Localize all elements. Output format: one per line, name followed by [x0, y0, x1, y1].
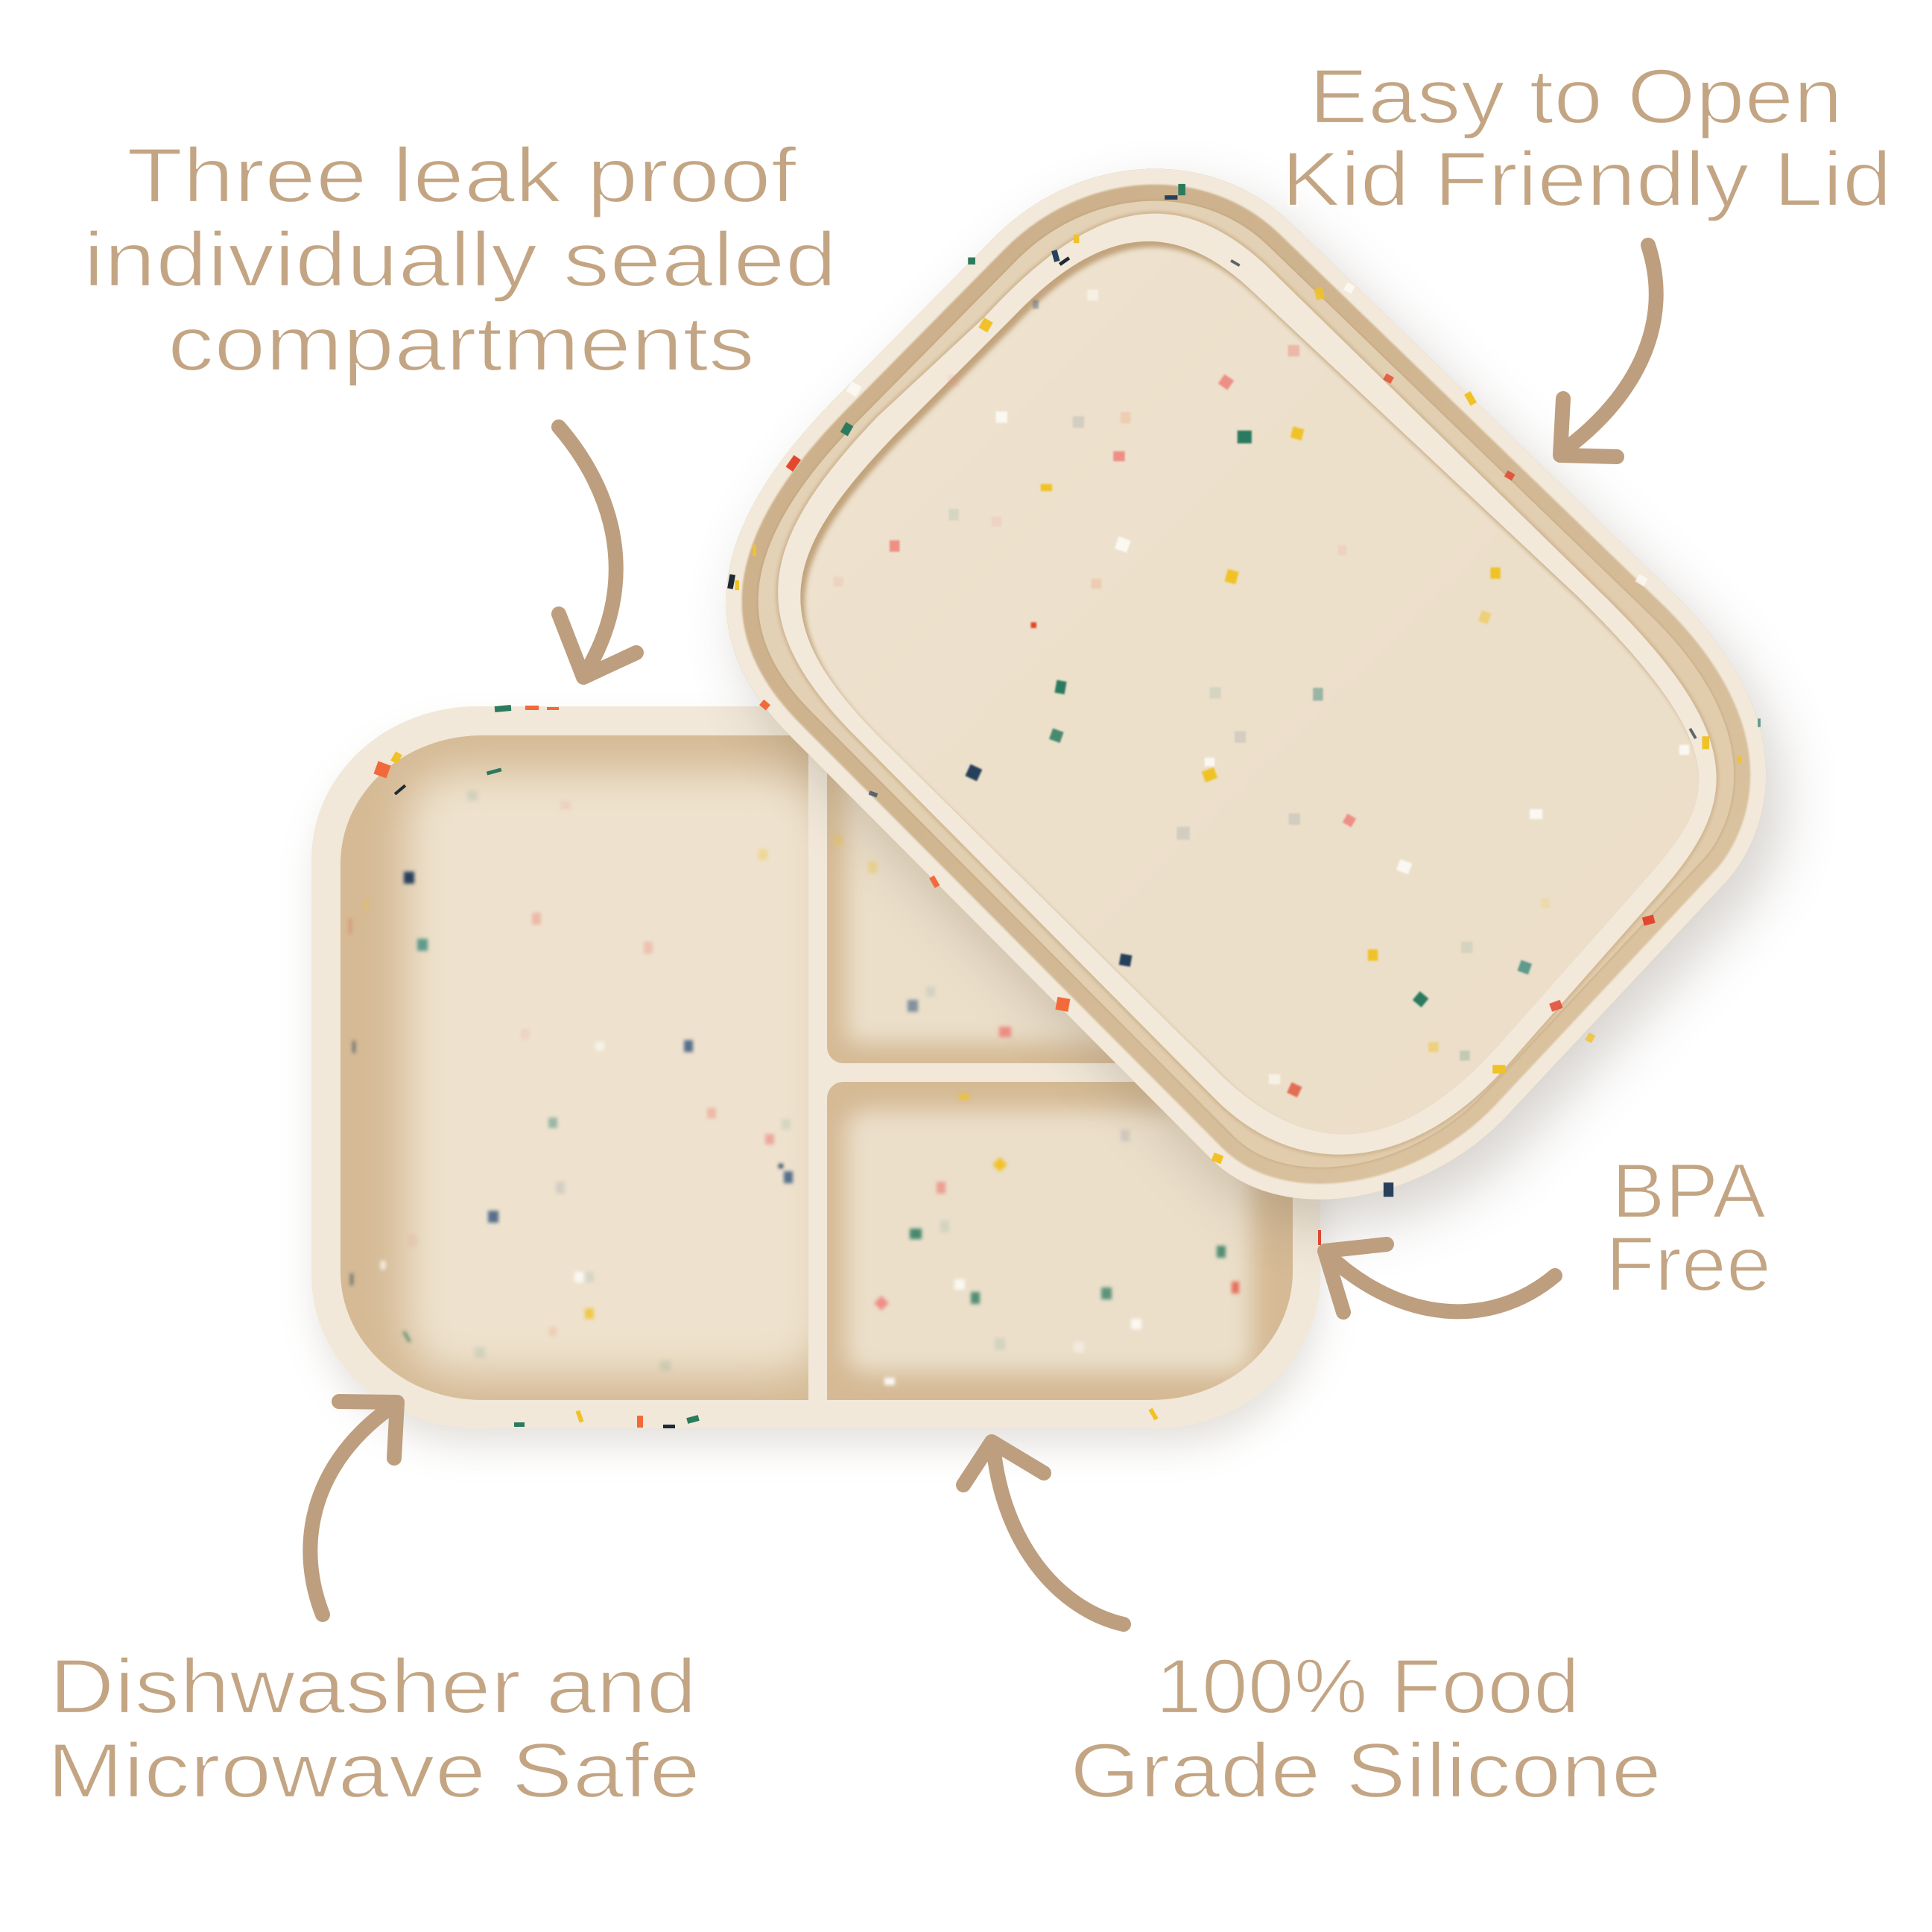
panel: lid	[726, 169, 1766, 1200]
confetti: box rim	[373, 705, 1321, 1428]
callout: three leak proof compartments: individually sealed	[83, 217, 837, 303]
callout: dishwasher and microwave safe: Dishwasher and	[49, 1644, 697, 1730]
callout: food grade silicone: Grade Silicone	[1070, 1728, 1662, 1814]
callout: easy to open lid: Kid Friendly Lid	[1282, 136, 1892, 223]
arrow: to box bottom	[963, 1442, 1124, 1624]
confetti: box interior	[349, 791, 1239, 1385]
arrow: to compartments	[559, 427, 636, 677]
callout: BPA free: BPA	[1612, 1148, 1767, 1235]
compartment: left	[341, 735, 827, 1400]
confetti: lid plate	[833, 289, 1689, 1098]
callout: food grade silicone: 100% Food	[1156, 1644, 1580, 1730]
callout: dishwasher and microwave safe: Microwave Safe	[47, 1728, 700, 1814]
lid inner ring	[778, 214, 1717, 1155]
callout: dishwasher and microwave safe	[47, 1644, 700, 1814]
arrow: to box corner	[310, 1402, 397, 1615]
callout: BPA free: Free	[1606, 1221, 1771, 1308]
callout: easy to open lid: Easy to Open	[1309, 54, 1843, 140]
arrow: to box right side	[1325, 1244, 1555, 1312]
vertical divider	[808, 738, 827, 1401]
lid top plate	[800, 241, 1703, 1140]
box shadow	[320, 734, 1319, 1442]
callout: three leak proof compartments: Three leak proof	[127, 133, 797, 219]
box outer rim	[311, 706, 1320, 1428]
ring contact shade	[778, 214, 1717, 1155]
panel: lunch box base	[311, 705, 1321, 1442]
arrow: to lid	[1560, 245, 1656, 457]
callout: easy to open lid	[1282, 54, 1892, 223]
horizontal divider	[820, 1063, 1282, 1082]
confetti: lid rim	[727, 184, 1761, 1197]
compartment: top right	[827, 773, 1116, 1063]
lid body and groove	[726, 169, 1766, 1200]
compartment: bottom right	[827, 1082, 1304, 1425]
callout: BPA free	[1606, 1148, 1771, 1308]
lid shadow	[743, 194, 1782, 1225]
callout: three leak proof compartments: compartments	[168, 301, 755, 387]
callout: three leak proof compartments	[83, 133, 837, 387]
callout: food grade silicone	[1070, 1644, 1662, 1814]
